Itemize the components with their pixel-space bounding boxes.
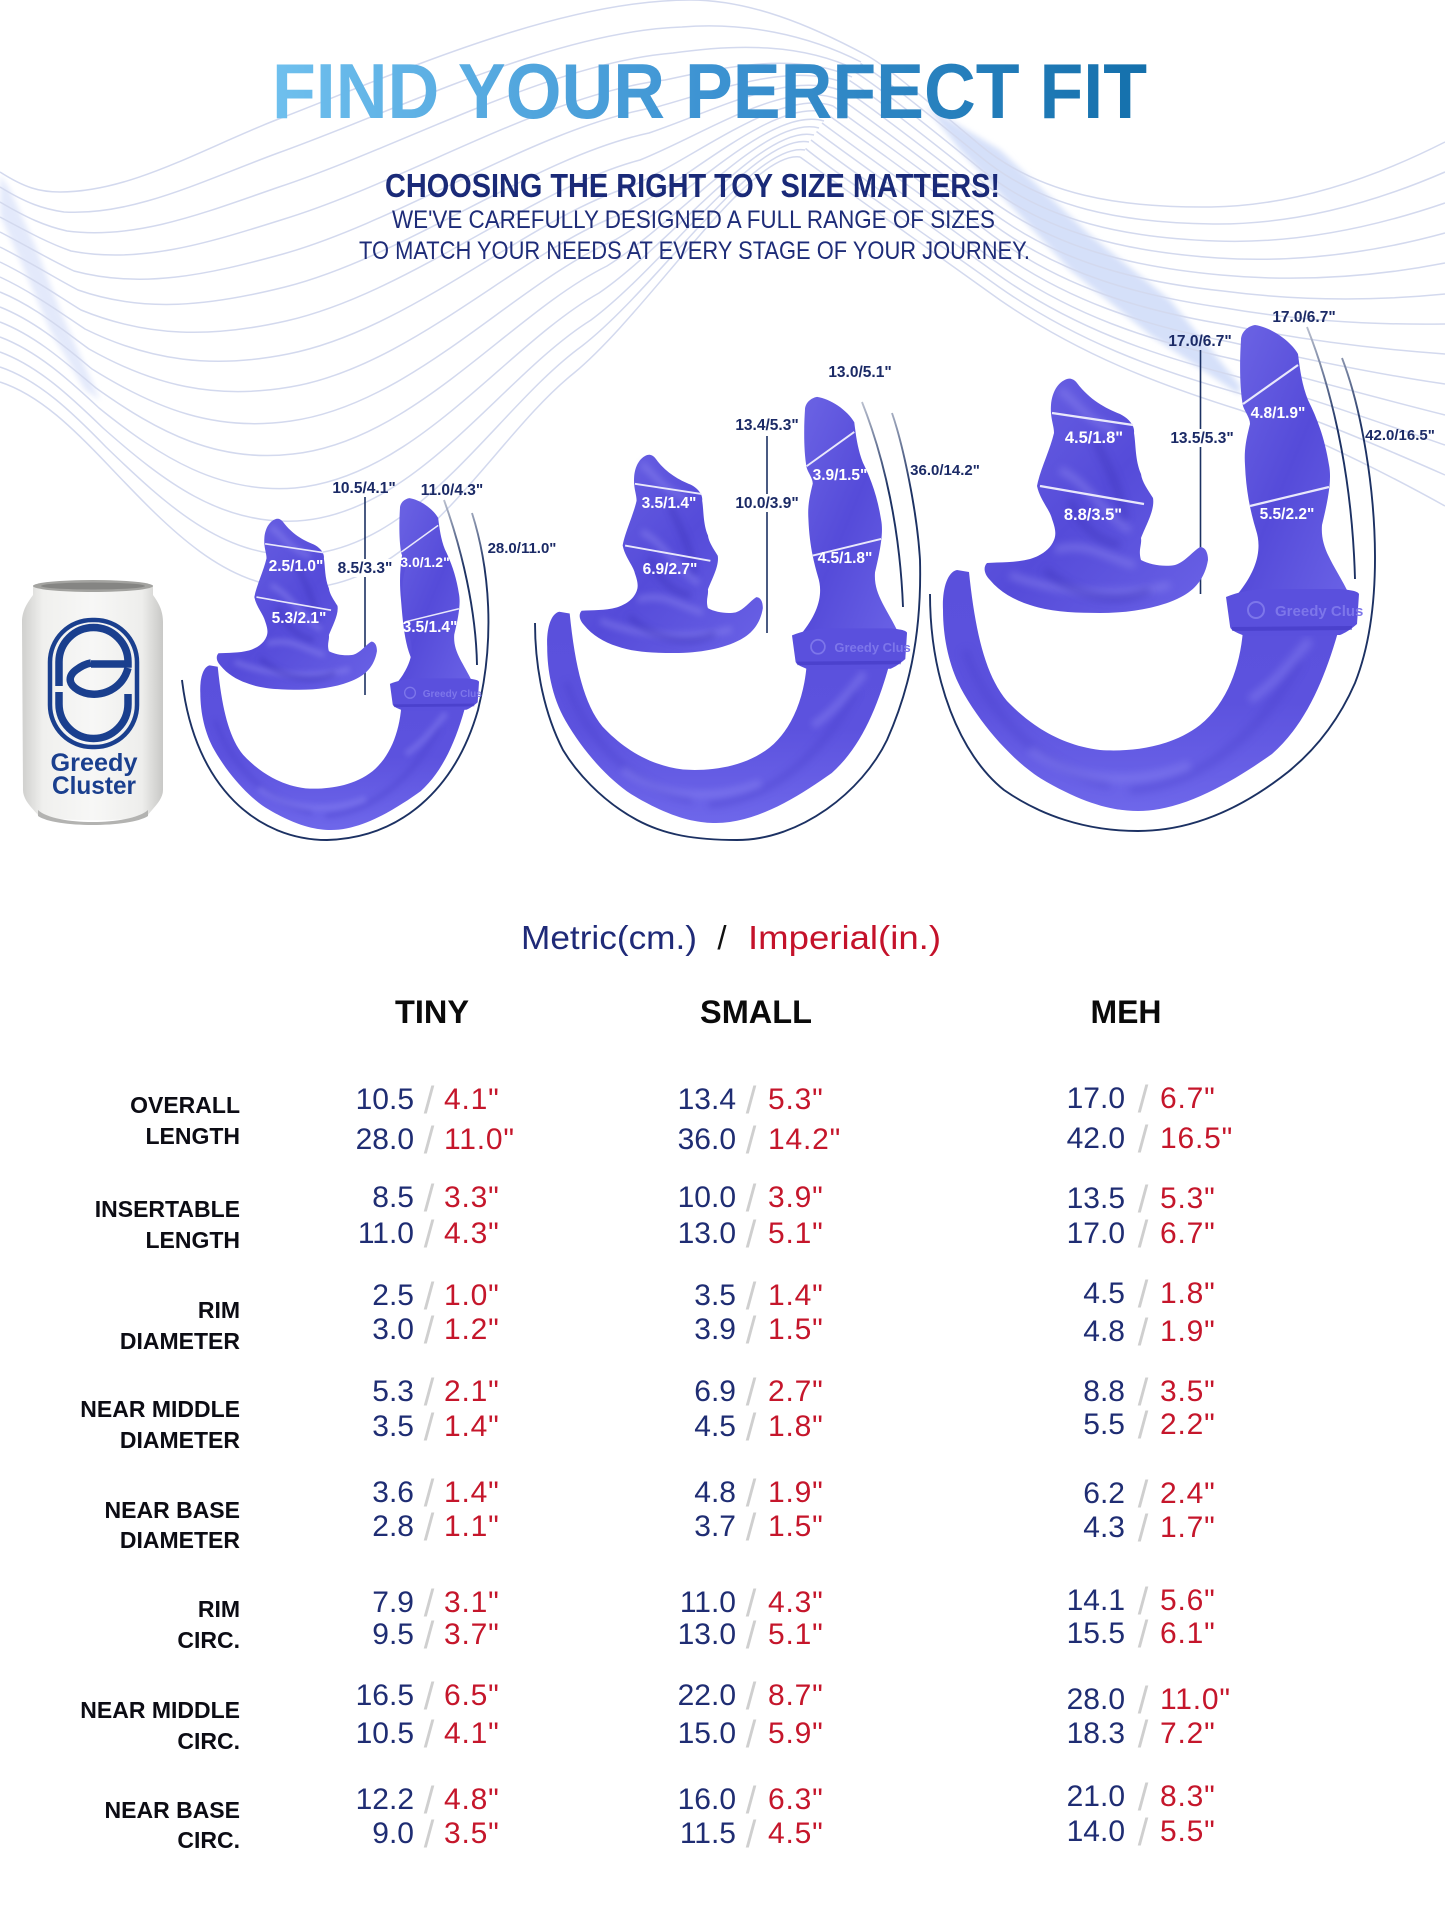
row: rim circumference: 7.9 [372,1586,414,1619]
row: overall length: 13.4 [678,1083,736,1116]
intro text [359,206,1030,265]
row: near base diameter: 1.1" [444,1510,500,1543]
row: insertable length: / [424,1178,435,1220]
row: near base diameter: NEAR BASE [105,1497,240,1523]
meh dimension labels: 17.0/6.7" [1272,309,1336,326]
row: near middle diameter: NEAR MIDDLE [80,1396,240,1422]
meh tail arcs [930,327,1375,831]
row: rim circumference: 5.6" [1160,1584,1216,1617]
row: near base diameter: / [746,1473,757,1515]
row: near base diameter: 2.8 [372,1510,414,1543]
row: rim diameter: 3.0 [372,1313,414,1346]
row: near middle diameter: 4.5 [694,1410,736,1443]
row: near base circumference: NEAR BASE [105,1797,240,1823]
small plug [580,455,763,653]
row: near middle diameter: 5.3 [372,1375,414,1408]
row: near middle diameter: / [746,1372,757,1414]
row: overall length: / [424,1080,435,1122]
column headings [395,994,1162,1030]
row: near middle diameter: 1.8" [768,1410,824,1443]
row: near middle circumference: 7.2" [1160,1717,1216,1750]
row: overall length: 11.0" [444,1123,515,1156]
row: insertable length: LENGTH [145,1227,240,1253]
tiny dimension labels: 3.0/1.2" [400,554,450,570]
row: overall length: / [424,1120,435,1162]
meh dimension labels: 42.0/16.5" [1365,427,1435,444]
row: near middle diameter: 2.7" [768,1375,824,1408]
row: near base circumference: 9.0 [372,1817,414,1850]
row: near middle diameter: 1.4" [444,1410,500,1443]
row: insertable length: 13.0 [678,1217,736,1250]
row: insertable length: 5.1" [768,1217,824,1250]
legend: metric / imperial [521,919,941,956]
row: rim diameter: 1.0" [444,1279,500,1312]
row: rim diameter: 1.5" [768,1313,824,1346]
can brand name: Cluster [52,772,136,800]
tiny dimension labels: 3.5/1.4" [403,619,457,636]
tiny dimension labels [269,480,556,636]
row: near base diameter: 2.4" [1160,1477,1216,1510]
icon: can logo [50,620,137,747]
row: rim circumference: 4.3" [768,1586,824,1619]
row: near base diameter: 4.8 [694,1476,736,1509]
row: insertable length: 8.5 [372,1181,414,1214]
row: insertable length: 5.3" [1160,1182,1216,1215]
small insertable line [766,436,768,633]
legend: metric / imperial: / [717,919,727,956]
row: near base circumference: 21.0 [1067,1780,1125,1813]
small dimension labels: 3.5/1.4" [642,495,696,512]
row: insertable length: / [1138,1214,1149,1256]
legend: metric / imperial: Metric(cm.) [521,919,697,956]
row: near base circumference: 11.5 [680,1817,736,1850]
tiny plug [217,519,377,690]
legend: metric / imperial: Imperial(in.) [748,919,941,956]
row: near base diameter: DIAMETER [120,1527,240,1553]
row: insertable length: 17.0 [1067,1217,1125,1250]
meh dimension labels [1064,309,1435,524]
row: overall length: / [1138,1119,1149,1161]
column headings: SMALL [700,994,812,1030]
intro text: WE'VE CAREFULLY DESIGNED A FULL RANGE OF SIZES [392,206,995,234]
row: rim diameter: 4.5 [1083,1277,1125,1310]
row: insertable length: 10.0 [678,1181,736,1214]
row: insertable length: 4.3" [444,1217,500,1250]
small tail arcs [535,402,920,840]
row: near middle diameter: 2.2" [1160,1408,1216,1441]
row: insertable length: / [424,1214,435,1256]
tiny dimension labels: 8.5/3.3" [338,560,392,577]
small dimension labels: 36.0/14.2" [910,462,980,479]
tiny dimension labels: 10.5/4.1" [332,480,396,497]
row: near middle circumference: 28.0 [1067,1683,1125,1716]
row: near base diameter: 1.5" [768,1510,824,1543]
row: overall length: 28.0 [356,1123,414,1156]
product: tiny [182,480,556,840]
intro text: TO MATCH YOUR NEEDS AT EVERY STAGE OF YOUR JOURNEY. [359,237,1030,265]
row: rim diameter: 1.8" [1160,1277,1216,1310]
small dimension labels: 6.9/2.7" [643,561,697,578]
row: near middle circumference: / [1138,1714,1149,1756]
row: overall length: 16.5" [1160,1122,1233,1155]
row: near base diameter: 3.7 [694,1510,736,1543]
row: rim circumference: RIM [198,1596,240,1622]
row: rim circumference: / [746,1615,757,1657]
row: rim diameter: / [424,1276,435,1318]
row: rim diameter: / [424,1310,435,1352]
row: near base circumference: / [746,1780,757,1822]
row: rim circumference: 14.1 [1067,1584,1125,1617]
row: near base circumference: / [1138,1812,1149,1854]
tiny insertable line [364,497,366,695]
row: rim diameter: / [746,1310,757,1352]
row: overall length [130,1079,1233,1162]
row: rim circumference: / [746,1583,757,1625]
row: rim circumference: / [424,1615,435,1657]
row: overall length: 36.0 [678,1123,736,1156]
row: near base diameter: 1.9" [768,1476,824,1509]
row: near base circumference: 12.2 [356,1783,414,1816]
row: near middle diameter: / [424,1407,435,1449]
row: insertable length [95,1178,1216,1256]
row: near middle circumference: 15.0 [678,1717,736,1750]
row: near base circumference: 5.5" [1160,1815,1216,1848]
row: overall length: 42.0 [1067,1122,1125,1155]
row: rim circumference: CIRC. [177,1627,240,1653]
row: near middle circumference: / [746,1676,757,1718]
meh dimension labels: 5.5/2.2" [1260,506,1314,523]
row: near middle diameter: DIAMETER [120,1427,240,1453]
row: near middle diameter: 8.8 [1083,1375,1125,1408]
small dimension labels: 10.0/3.9" [735,495,799,512]
row: overall length: LENGTH [145,1123,240,1149]
row: near base circumference: / [1138,1777,1149,1819]
row: near base diameter [105,1473,1216,1553]
row: near base diameter: / [1138,1508,1149,1550]
row: rim diameter: 1.9" [1160,1315,1216,1348]
row: overall length: 14.2" [768,1123,841,1156]
row: rim circumference: / [424,1583,435,1625]
row: near base diameter: / [424,1507,435,1549]
tiny tail form [200,498,482,830]
row: overall length: OVERALL [130,1092,240,1118]
row: near middle circumference: NEAR MIDDLE [80,1697,240,1723]
row: overall length: 6.7" [1160,1082,1216,1115]
tiny tail arcs [182,500,488,840]
row: near base diameter: / [746,1507,757,1549]
small dimension labels: 13.0/5.1" [828,364,892,381]
small dimension labels [642,364,980,578]
row: rim circumference: / [1138,1581,1149,1623]
row: near middle circumference: / [746,1714,757,1756]
row: near middle circumference [80,1676,1231,1756]
row: overall length: 4.1" [444,1083,500,1116]
tiny dimension labels: 5.3/2.1" [272,610,326,627]
row: rim diameter: 2.5 [372,1279,414,1312]
row: near middle circumference: 11.0" [1160,1683,1231,1716]
meh dimension labels: 13.5/5.3" [1170,430,1234,447]
row: rim circumference: 3.1" [444,1586,500,1619]
row: rim circumference: 3.7" [444,1618,500,1651]
row: rim diameter: DIAMETER [120,1328,240,1354]
small dimension labels: 13.4/5.3" [735,417,799,434]
meh tail form [943,325,1363,811]
row: near middle diameter: 2.1" [444,1375,500,1408]
row: near middle diameter: 3.5" [1160,1375,1216,1408]
row: near middle circumference: 6.5" [444,1679,500,1712]
row: near base circumference: / [746,1814,757,1856]
row: rim circumference: 15.5 [1067,1617,1125,1650]
row: near middle diameter: 6.9 [694,1375,736,1408]
row: rim diameter [120,1274,1216,1354]
row: near middle circumference: / [424,1714,435,1756]
row: near base circumference: 4.8" [444,1783,500,1816]
row: near middle diameter [80,1372,1216,1453]
row: rim diameter: / [1138,1312,1149,1354]
row: near middle circumference: 16.5 [356,1679,414,1712]
row: rim circumference: 11.0 [680,1586,736,1619]
row: rim diameter: / [1138,1274,1149,1316]
row: rim diameter: 3.5 [694,1279,736,1312]
row: rim circumference: 9.5 [372,1618,414,1651]
column headings: MEH [1090,994,1162,1030]
row: near middle diameter: 5.5 [1083,1408,1125,1441]
tiny dimension labels: 28.0/11.0" [488,540,556,557]
row: rim diameter: RIM [198,1297,240,1323]
can brand name: Greedy [50,749,138,777]
meh dimension labels: 4.8/1.9" [1251,405,1305,422]
row: insertable length: 11.0 [358,1217,414,1250]
row: rim diameter: 3.9 [694,1313,736,1346]
subtitle heading: CHOOSING THE RIGHT TOY SIZE MATTERS! [385,167,1000,204]
meh dimension labels: 8.8/3.5" [1064,506,1122,524]
row: near middle circumference: 5.9" [768,1717,824,1750]
row: rim circumference [177,1581,1216,1657]
row: near base diameter: 3.6 [372,1476,414,1509]
row: near middle circumference: 4.1" [444,1717,500,1750]
small dimension labels: 3.9/1.5" [813,467,867,484]
meh insertable line [1200,350,1202,594]
row: near base circumference: 14.0 [1067,1815,1125,1848]
icon: branded can for scale [22,580,163,825]
meh dimension labels: 17.0/6.7" [1168,333,1232,350]
row: near base circumference: 16.0 [678,1783,736,1816]
row: rim circumference: 5.1" [768,1618,824,1651]
row: rim circumference: 6.1" [1160,1617,1216,1650]
row: overall length: / [746,1080,757,1122]
row: insertable length: / [746,1214,757,1256]
row: near middle circumference: 8.7" [768,1679,824,1712]
row: overall length: / [1138,1079,1149,1121]
small tail form [547,397,911,823]
row: near base diameter: 1.4" [444,1476,500,1509]
row: rim diameter: / [746,1276,757,1318]
tiny dimension labels: 2.5/1.0" [269,558,323,575]
row: near base circumference: / [424,1814,435,1856]
row: near middle circumference: 18.3 [1067,1717,1125,1750]
row: overall length: / [746,1120,757,1162]
row: near middle circumference: / [1138,1680,1149,1722]
row: insertable length: / [1138,1179,1149,1221]
row: near middle circumference: 10.5 [356,1717,414,1750]
background wave lines [0,0,1445,588]
row: near base diameter: / [1138,1474,1149,1516]
row: near base circumference: 3.5" [444,1817,500,1850]
row: insertable length: INSERTABLE [95,1196,240,1222]
row: near base circumference: 4.5" [768,1817,824,1850]
row: insertable length: 3.9" [768,1181,824,1214]
row: near base diameter: 6.2 [1083,1477,1125,1510]
row: near middle diameter: / [1138,1405,1149,1447]
small dimension labels: 4.5/1.8" [818,550,872,567]
row: near base circumference [105,1777,1216,1856]
row: near middle diameter: / [424,1372,435,1414]
row: near middle circumference: / [424,1676,435,1718]
row: near middle diameter: / [1138,1372,1149,1414]
row: insertable length: 13.5 [1067,1182,1125,1215]
row: near middle diameter: 3.5 [372,1410,414,1443]
row: near middle circumference: 22.0 [678,1679,736,1712]
column headings: TINY [395,994,469,1030]
row: rim circumference: 13.0 [678,1618,736,1651]
row: rim diameter: 4.8 [1083,1315,1125,1348]
tiny dimension labels: 11.0/4.3" [421,482,483,499]
meh plug [985,379,1208,613]
row: near base circumference: 6.3" [768,1783,824,1816]
row: near middle circumference: CIRC. [177,1728,240,1754]
tiny shaft widening patch [400,520,425,660]
row: insertable length: / [746,1178,757,1220]
product: meh [930,309,1435,831]
row: rim circumference: / [1138,1614,1149,1656]
meh dimension labels: 4.5/1.8" [1065,429,1123,447]
row: rim diameter: 1.2" [444,1313,500,1346]
row: near base circumference: CIRC. [177,1827,240,1853]
row: overall length: 10.5 [356,1083,414,1116]
row: near base diameter: / [424,1473,435,1515]
can brand name [50,749,138,800]
title: FIND YOUR PERFECT FIT [272,47,1147,135]
row: near middle diameter: / [746,1407,757,1449]
row: insertable length: 6.7" [1160,1217,1216,1250]
row: near base diameter: 1.7" [1160,1511,1216,1544]
product: small [535,364,980,840]
row: near base diameter: 4.3 [1083,1511,1125,1544]
row: overall length: 5.3" [768,1083,824,1116]
row: near base circumference: 8.3" [1160,1780,1216,1813]
row: rim diameter: 1.4" [768,1279,824,1312]
row: near base circumference: / [424,1780,435,1822]
row: insertable length: 3.3" [444,1181,500,1214]
row: overall length: 17.0 [1067,1082,1125,1115]
